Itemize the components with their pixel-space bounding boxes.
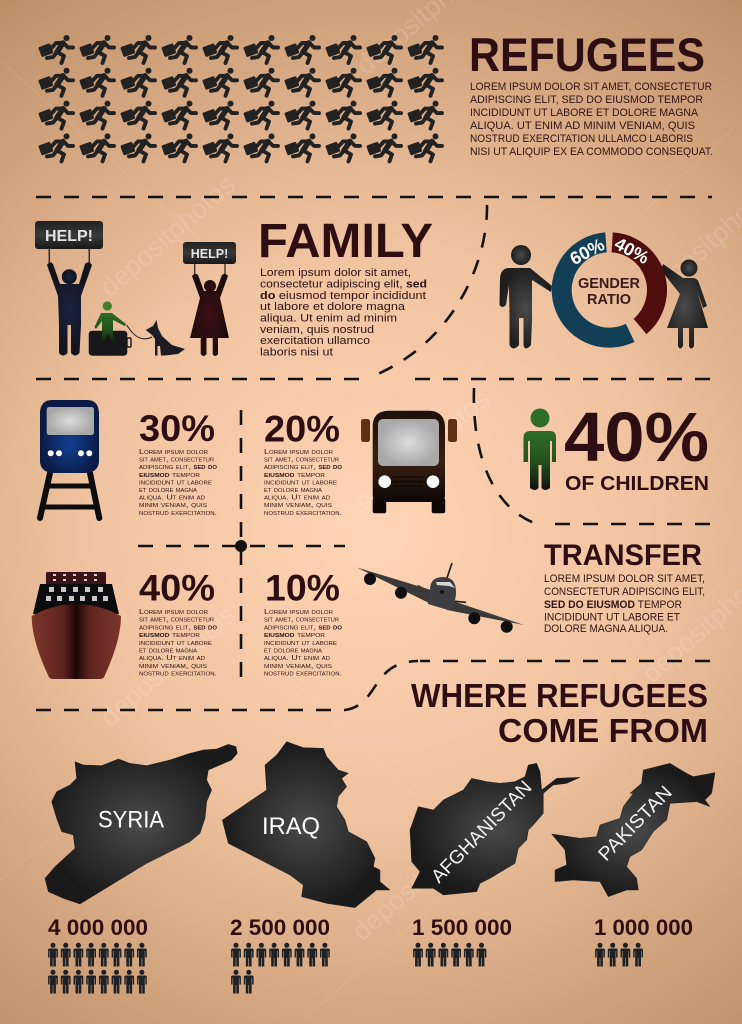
sign: woman: HELP! [191, 247, 228, 261]
icon: ship [32, 572, 121, 679]
stat: 40% ship: Lorem ipsum dolor [139, 607, 208, 616]
stat: 10% plane: sit amet, consectetur [264, 615, 339, 624]
family text [260, 267, 427, 358]
sign: man: HELP! [45, 228, 93, 245]
stat: 40% ship: incididunt ut labore [139, 638, 213, 647]
intro text: LOREM IPSUM DOLOR SIT AMET, CONSECTETUR [470, 81, 712, 93]
heading: where refugees come from: WHERE REFUGEES [411, 677, 708, 714]
intro text: INCIDIDUNT UT LABORE ET DOLORE MAGNA [470, 107, 699, 119]
stat: 20% bus: et dolore magna [264, 485, 323, 494]
count: Syria 4 000 000 [48, 915, 148, 994]
stat: 10% plane: nostrud exercitation. [264, 669, 342, 678]
stat: 30% train: Lorem ipsum dolor [139, 447, 208, 456]
stat: 40% ship: sit amet, consectetur [139, 615, 214, 624]
heading: where refugees come from [411, 677, 708, 749]
family heading: FAMILY [258, 215, 433, 268]
intro text: ALIQUA. UT ENIM AD MINIM VENIAM, QUIS [470, 120, 695, 132]
map: Iraq [222, 742, 390, 908]
man figure [47, 262, 92, 356]
stat: 40% ship: minim veniam, quis [139, 661, 208, 670]
stat: 20% bus [264, 408, 342, 517]
transfer text: LOREM IPSUM DOLOR SIT AMET, [544, 573, 705, 585]
watermarks: depositphotos [94, 600, 241, 733]
stat: 30% train [139, 407, 217, 517]
stat: 30% train: 30% [139, 407, 215, 449]
gender ratio label: RATIO [587, 291, 631, 308]
transfer text: DOLORE MAGNA ALIQUA. [544, 623, 668, 635]
stat: 40% ship: adipiscing elit, sed do [139, 622, 217, 631]
stat: 20% bus: adipiscing elit, sed do [264, 462, 342, 471]
stat: 30% train: aliqua. Ut enim ad [139, 493, 205, 502]
icon: child green [524, 408, 556, 490]
intro text: NISI UT ALIQUIP EX EA COMMODO CONSEQUAT. [470, 146, 713, 158]
gender ratio label [578, 275, 640, 308]
family illustration [35, 221, 236, 356]
ring labels: 40% [611, 233, 652, 268]
stat: 10% plane: et dolore magna [264, 646, 323, 654]
count: Pakistan 1 000 000: 1 000 000 [594, 915, 693, 940]
transfer text: SED DO EIUSMOD TEMPOR [544, 599, 682, 611]
watermarks: depositphotos [94, 170, 241, 303]
stat: 10% plane: 10% [265, 566, 340, 608]
stat: 20% bus: minim veniam, quis [264, 500, 333, 509]
family text: exercitation ullamco [260, 335, 370, 347]
map: Syria: SYRIA [98, 806, 164, 834]
dog [146, 320, 185, 356]
map: Pakistan [552, 763, 715, 897]
intro text: ADIPISCING ELIT, SED DO EIUSMOD TEMPOR [470, 94, 703, 106]
big stat: 40% of children: 40% [564, 398, 709, 476]
woman icon [661, 260, 708, 348]
stat: 10% plane: minim veniam, quis [264, 661, 333, 670]
stat: 30% train: minim veniam, quis [139, 500, 208, 509]
count: Pakistan 1 000 000 [594, 915, 693, 966]
map: Syria [45, 744, 237, 904]
ring labels: 60% [567, 234, 608, 269]
transfer heading: TRANSFER [544, 539, 702, 572]
dashed route lines [36, 197, 712, 710]
stat: 20% bus: nostrud exercitation. [264, 508, 342, 517]
ring: 40% [612, 242, 657, 326]
icon: airplane [357, 563, 524, 633]
child on suitcase [89, 301, 131, 356]
map: Pakistan: PAKISTAN [595, 782, 677, 865]
stat: 20% bus: eiusmod tempor [264, 470, 325, 479]
heading: where refugees come from: COME FROM [498, 712, 708, 749]
stat: 10% plane: aliqua. Ut enim ad [264, 653, 330, 662]
woman figure [190, 274, 229, 356]
stat: 30% train: adipiscing elit, sed do [139, 462, 217, 471]
family text: Lorem ipsum dolor sit amet, [260, 267, 411, 279]
gender ratio label: GENDER [578, 275, 640, 292]
leash [127, 325, 152, 339]
sign: woman [183, 242, 236, 276]
count: Iraq 2 500 000 [230, 915, 330, 994]
stat: 40% ship: et dolore magna [139, 646, 198, 654]
family text: consectetur adipiscing elit, sed [260, 278, 427, 290]
stat: 40% ship: eiusmod tempor [139, 630, 200, 639]
man icon [500, 245, 552, 348]
icon: train [40, 400, 99, 518]
intro text [470, 81, 713, 158]
stat: 20% bus: sit amet, consectetur [264, 455, 339, 464]
stat: 30% train: et dolore magna [139, 485, 198, 494]
intro text: NOSTRUD EXERCITATION ULLAMCO LABORIS [470, 133, 693, 145]
count: Iraq 2 500 000: 2 500 000 [230, 915, 330, 940]
family text: veniam, quis nostrud [260, 324, 374, 336]
transfer text: INCIDIDUNT UT LABORE ET [544, 612, 681, 624]
family text: aliqua. Ut enim ad minim [260, 312, 397, 324]
stat: 40% ship: nostrud exercitation. [139, 669, 217, 678]
stat: 10% plane: adipiscing elit, sed do [264, 622, 342, 631]
stat: 20% bus: Lorem ipsum dolor [264, 447, 333, 456]
count: Afghanistan 1 500 000 [412, 915, 512, 966]
running refugees icon grid [38, 35, 442, 161]
stat: 30% train: sit amet, consectetur [139, 455, 214, 464]
family text: do eiusmod tempor incididunt [260, 290, 426, 302]
count: Afghanistan 1 500 000: 1 500 000 [412, 915, 512, 940]
ring: 60% [562, 242, 630, 338]
stat: 30% train: incididunt ut labore [139, 477, 213, 486]
title: REFUGEES [469, 28, 705, 81]
stat: 30% train: eiusmod tempor [139, 470, 200, 479]
sign: man [35, 221, 103, 264]
stat: 10% plane [264, 566, 342, 678]
stat: 40% ship: aliqua. Ut enim ad [139, 653, 205, 662]
stat: 20% bus: aliqua. Ut enim ad [264, 493, 330, 502]
map: Afghanistan [410, 763, 580, 895]
map: Afghanistan: AFGHANISTAN [428, 777, 536, 887]
count: Syria 4 000 000: 4 000 000 [48, 915, 148, 940]
watermarks: depositphotos [346, 814, 493, 947]
watermarks: depositphotos [349, 384, 496, 517]
transfer text: CONSECTETUR ADIPISCING ELIT, [544, 586, 705, 598]
stat: 10% plane: eiusmod tempor [264, 630, 325, 639]
stat: 10% plane: Lorem ipsum dolor [264, 607, 333, 616]
stat: 20% bus: incididunt ut labore [264, 477, 338, 486]
family text: ut labore et dolore magna [260, 301, 406, 313]
ring labels [567, 233, 652, 269]
stat: 30% train: nostrud exercitation. [139, 508, 217, 517]
stat: 40% ship: 40% [139, 566, 215, 608]
family text: laboris nisi ut [260, 346, 333, 358]
stat: 10% plane: incididunt ut labore [264, 638, 338, 647]
map: Iraq: IRAQ [262, 813, 320, 840]
big stat: 40% of children: OF CHILDREN [565, 472, 709, 495]
stat: 20% bus: 20% [264, 408, 340, 450]
gender ratio chart [500, 233, 708, 348]
icon: bus [361, 411, 457, 513]
stat: 40% ship [139, 566, 217, 678]
transfer text [544, 573, 705, 635]
